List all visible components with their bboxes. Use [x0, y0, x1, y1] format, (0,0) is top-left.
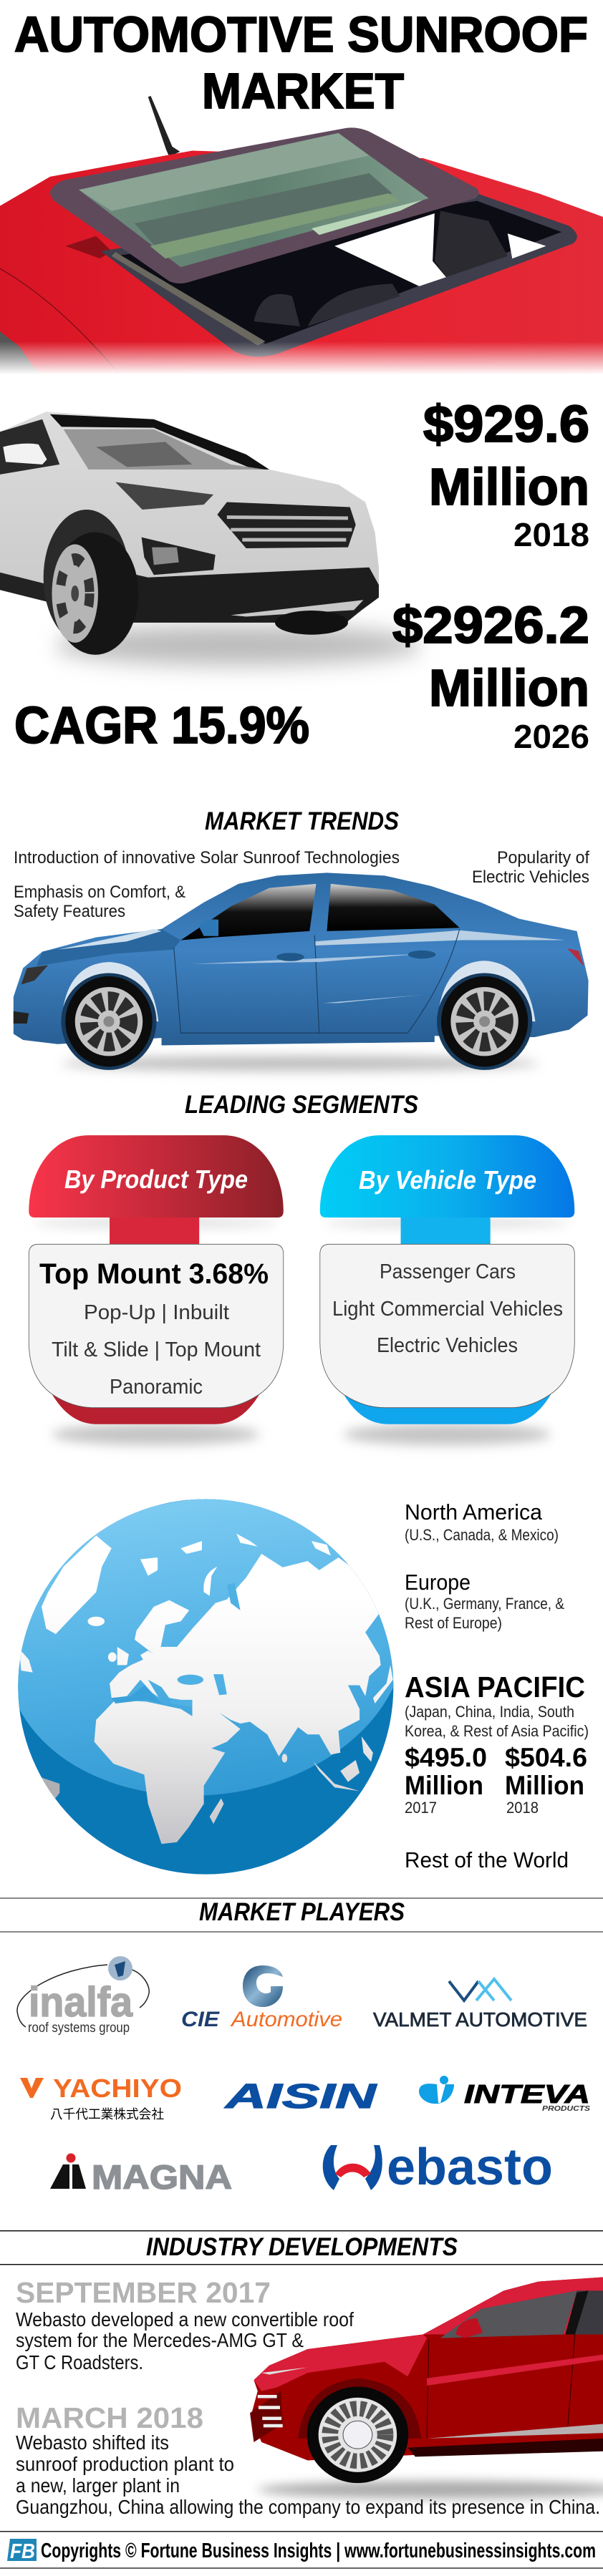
development: September 2017: SEPTEMBER 2017: [16, 2276, 271, 2309]
logo: Inteva Products: PRODUCTS: [542, 2105, 590, 2113]
stat: 2026 market size: Million: [429, 660, 589, 717]
regions list: [405, 1500, 589, 1872]
title: AUTOMOTIVE SUNROOF: [14, 6, 588, 62]
logo: Inteva Products: INTEVA: [464, 2079, 590, 2109]
logo: Yachiyo: YACHIYO: [53, 2074, 182, 2103]
logo: Magna: [50, 2153, 232, 2196]
Rest of the World: Rest of the World: [405, 1847, 569, 1872]
header label: By Vehicle Type: [359, 1165, 536, 1195]
vehicle list: Passenger Cars: [380, 1260, 516, 1283]
stat: 2018 market size: [423, 396, 589, 553]
development: March 2018: sunroof production plant to: [16, 2453, 234, 2475]
North America: North America: [405, 1500, 543, 1525]
Europe: [405, 1570, 564, 1632]
blue sedan illustration: [14, 873, 589, 1071]
Asia Pacific: Million: [405, 1771, 483, 1800]
vehicle list: Electric Vehicles: [377, 1334, 518, 1357]
logo: Inalfa: inalfa: [29, 1979, 133, 2026]
product list: Top Mount 3.68%: [39, 1258, 269, 1290]
heading: market trends: MARKET TRENDS: [205, 807, 399, 835]
logo: Yachiyo: 八千代工業株式会社: [50, 2107, 164, 2121]
logo: Webasto: ebasto: [387, 2139, 553, 2196]
product list: Tilt & Slide | Top Mount: [52, 1338, 261, 1361]
development: September 2017: Webasto developed a new convertible roof: [16, 2308, 354, 2330]
Asia Pacific: (Japan, China, India, South: [405, 1703, 574, 1721]
development: March 2018: Webasto shifted its: [16, 2431, 169, 2454]
development: March 2018: [16, 2401, 600, 2518]
North America: [405, 1500, 559, 1544]
logo: CIE Automotive: [181, 1965, 342, 2031]
development: March 2018: MARCH 2018: [16, 2401, 203, 2434]
product list: Pop-Up | Inbuilt: [84, 1301, 229, 1324]
logo: Aisin: AISIN: [224, 2078, 377, 2116]
product list: Panoramic: [110, 1376, 203, 1399]
development: September 2017: system for the Mercedes-AMG GT &: [16, 2329, 304, 2351]
logo: Yachiyo: [20, 2074, 182, 2121]
stat: 2026 market size: $2926.2: [392, 597, 589, 654]
Asia Pacific: $495.0: [405, 1743, 487, 1772]
Europe: Rest of Europe): [405, 1614, 502, 1632]
heading: market players: MARKET PLAYERS: [199, 1898, 405, 1926]
stat: 2026 market size: 2026: [513, 718, 589, 755]
Asia Pacific: $504.6: [505, 1743, 587, 1772]
hero image: red car roof with open sunroof: [0, 96, 603, 374]
logo: Valmet Automotive: [373, 1979, 587, 2031]
stat: 2018 market size: $929.6: [423, 396, 589, 453]
globe map: [18, 1499, 394, 1875]
Asia Pacific: 2018: [506, 1799, 539, 1817]
vehicle list: [332, 1260, 563, 1357]
product list: [39, 1258, 269, 1399]
heading: industry developments: INDUSTRY DEVELOPMENTS: [146, 2233, 458, 2261]
market trend labels: [14, 848, 589, 921]
stat: 2026 market size: [392, 597, 589, 755]
North America: (U.S., Canada, & Mexico): [405, 1526, 559, 1544]
red SUV illustration: [250, 2277, 603, 2499]
stat: 2018 market size: 2018: [513, 516, 589, 553]
title: MARKET: [202, 63, 404, 119]
panel: by product type: [29, 1135, 284, 1445]
development: September 2017: GT C Roadsters.: [16, 2351, 143, 2373]
logo: Magna: MAGNA: [92, 2158, 232, 2196]
vehicle list: Light Commercial Vehicles: [332, 1298, 563, 1321]
Asia Pacific: Million: [505, 1771, 584, 1800]
market trend labels: Emphasis on Comfort, &: [14, 883, 185, 902]
stat: CAGR: CAGR 15.9%: [14, 697, 309, 754]
Europe: (U.K., Germany, France, &: [405, 1595, 564, 1613]
market trend labels: Introduction of innovative Solar Sunroof Technologies: [14, 848, 400, 867]
icon: Fortune Business Insights logo: FB: [10, 2540, 35, 2563]
development: March 2018: a new, larger plant in: [16, 2474, 180, 2497]
heading: leading segments: LEADING SEGMENTS: [185, 1091, 418, 1119]
Europe: Europe: [405, 1570, 471, 1595]
logo: Inteva Products: [419, 2076, 590, 2113]
logo: CIE Automotive: CIE: [181, 2008, 220, 2031]
Asia Pacific: ASIA PACIFIC: [405, 1671, 585, 1703]
logo: Valmet Automotive: VALMET AUTOMOTIVE: [373, 2008, 587, 2031]
market trend labels: Electric Vehicles: [472, 867, 589, 887]
market trend labels: Popularity of: [497, 848, 589, 867]
header label: By Product Type: [64, 1165, 248, 1194]
logo: CIE Automotive: Automotive: [230, 2008, 342, 2031]
Asia Pacific: [405, 1671, 589, 1817]
Asia Pacific: 2017: [405, 1799, 437, 1817]
footer: [0, 2531, 603, 2569]
panel: by vehicle type: [320, 1135, 574, 1445]
title: [14, 6, 588, 119]
logo: Inalfa: roof systems group: [28, 2021, 130, 2036]
stat: 2018 market size: Million: [429, 459, 589, 516]
development: September 2017: [16, 2276, 354, 2373]
market trend labels: Safety Features: [14, 902, 125, 921]
logo: Inalfa: [17, 1956, 149, 2036]
white SUV photo: [0, 412, 423, 665]
